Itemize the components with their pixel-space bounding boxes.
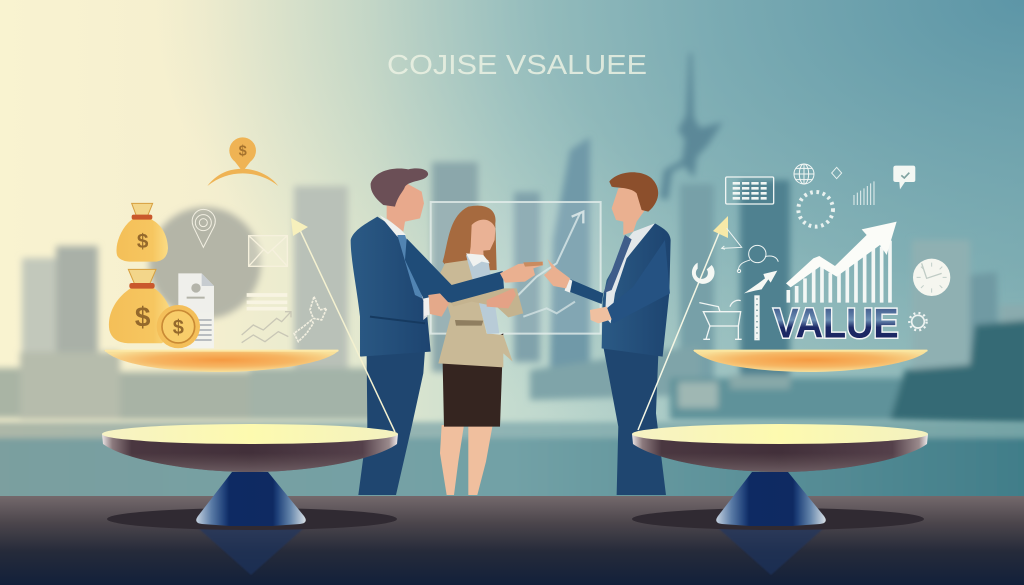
icon: clock bbox=[913, 259, 950, 296]
icon: bottom money bag bbox=[109, 269, 172, 343]
woman blazer bbox=[438, 260, 513, 367]
river and waterfront bbox=[0, 422, 1024, 508]
left man hair bbox=[371, 168, 428, 207]
value word: VALUE bbox=[773, 301, 899, 347]
person: woman in beige blazer bbox=[438, 206, 523, 495]
left cone reflection bbox=[197, 527, 305, 575]
icon: donut ring bbox=[692, 263, 715, 284]
left arrow tip bbox=[291, 218, 308, 236]
woman skirt bbox=[443, 333, 503, 427]
left pedestal bbox=[196, 472, 306, 526]
right ground shadow bbox=[632, 508, 924, 530]
right scale: value side bbox=[632, 216, 928, 575]
icon: document bbox=[178, 273, 214, 348]
floor bbox=[0, 496, 1024, 585]
title: COJISE VSALUEE bbox=[387, 49, 647, 80]
left man pointing arm bbox=[405, 238, 504, 303]
left man trousers bbox=[358, 350, 425, 495]
woman folded arm bbox=[450, 288, 523, 317]
right man hair bbox=[609, 172, 658, 212]
right arrow tip bbox=[713, 216, 728, 238]
icon: bottom money bag: $ bbox=[135, 302, 151, 333]
right upper pan bbox=[693, 350, 928, 372]
icon: top money bag bbox=[116, 203, 168, 262]
left ground shadow bbox=[107, 508, 397, 530]
icon: gold coin: $ bbox=[173, 317, 184, 339]
right pedestal bbox=[716, 472, 826, 526]
left man shirt and tie bbox=[379, 215, 406, 237]
left man lower hand bbox=[428, 293, 449, 317]
left upper pan bbox=[104, 350, 339, 372]
icon: text lines bbox=[247, 295, 287, 309]
icon: settings gear bbox=[909, 313, 927, 330]
icon: gear bubble with arrows bbox=[737, 245, 778, 273]
left support line bbox=[299, 228, 395, 432]
icon: New Zealand outline bbox=[294, 297, 327, 342]
right man shirt and tie bbox=[605, 223, 655, 323]
right man jacket bbox=[602, 223, 671, 357]
icon: location dollar pin: $ bbox=[239, 144, 247, 160]
woman legs bbox=[440, 425, 493, 495]
icon: fingerprint pin bbox=[192, 209, 215, 247]
icon: top money bag: $ bbox=[137, 230, 149, 253]
right dish bbox=[632, 424, 928, 472]
cost icons bbox=[105, 137, 338, 351]
icon: small upward arrow bbox=[744, 271, 777, 293]
icon: envelope bbox=[249, 236, 287, 266]
icon: small bar chart bbox=[854, 181, 874, 205]
right man trousers bbox=[603, 347, 666, 495]
icon: calendar panel bbox=[726, 177, 774, 204]
icon: speech bubble check bbox=[893, 166, 915, 189]
chart: rising value bars bbox=[788, 241, 890, 303]
icon: trend zigzags bbox=[242, 312, 291, 343]
icon: globe bbox=[794, 164, 814, 184]
icon: triangle arrows bbox=[722, 228, 742, 249]
left scale: cost side bbox=[102, 218, 398, 575]
value icons bbox=[692, 164, 950, 351]
right man arm bbox=[569, 279, 603, 304]
icon: ruler bbox=[754, 295, 760, 340]
right pan rim highlight bbox=[694, 348, 927, 354]
icon: location dollar pin bbox=[207, 137, 278, 186]
blurred city skyline bbox=[0, 53, 1024, 425]
left pan rim highlight bbox=[105, 348, 338, 354]
icon: shopping cart bbox=[699, 300, 742, 339]
person: right man in blue suit bbox=[544, 172, 671, 495]
woman blouse bbox=[466, 255, 499, 334]
icon: gold coin bbox=[157, 305, 200, 348]
left man jacket bbox=[351, 217, 431, 357]
left man face bbox=[387, 183, 424, 232]
right support line bbox=[638, 226, 722, 430]
translucent chart panel bbox=[431, 202, 601, 334]
right man face bbox=[612, 183, 645, 235]
icon: dotted wreath ring bbox=[798, 192, 833, 227]
icon: diamond bbox=[832, 167, 842, 179]
person: left man in blue suit bbox=[351, 168, 543, 495]
woman face and neck bbox=[468, 220, 495, 263]
right cone reflection bbox=[717, 527, 825, 575]
icon: big rising arrow bbox=[786, 222, 897, 287]
woman hair back bbox=[443, 206, 497, 272]
left dish bbox=[102, 424, 398, 472]
